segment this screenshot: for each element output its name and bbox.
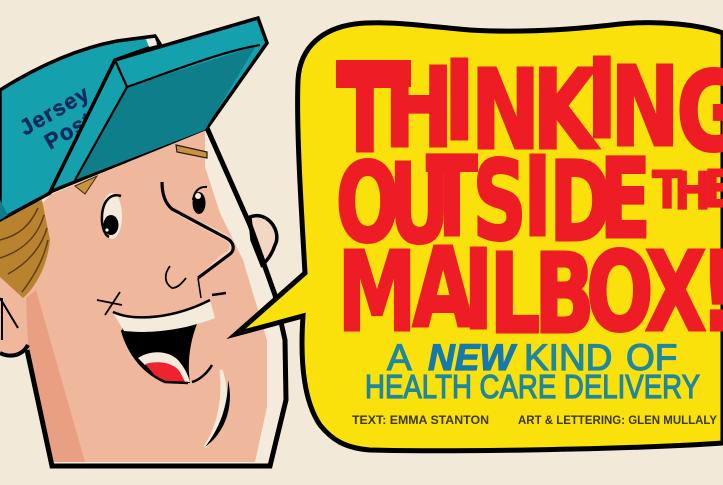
chin dimple xyxy=(205,370,230,447)
title xyxy=(336,35,723,358)
title line: outside: OUTSIDE xyxy=(336,134,651,269)
speech bubble xyxy=(236,23,723,451)
cap lettering: Post xyxy=(40,106,98,154)
subtitle line one: KIND xyxy=(524,337,612,378)
subtitle line one: NEW xyxy=(428,337,517,378)
credits xyxy=(352,413,717,427)
cap lettering: Jersey xyxy=(15,80,94,140)
head outline xyxy=(27,128,286,466)
nose xyxy=(162,182,234,298)
eyebrow left xyxy=(75,176,97,194)
right ear xyxy=(250,216,277,265)
cheek shadow band xyxy=(26,290,85,462)
cap visor xyxy=(50,18,267,192)
left ear lower outline xyxy=(0,345,28,356)
subtitle xyxy=(365,337,700,405)
right eye xyxy=(192,187,207,214)
face skin and left ear xyxy=(0,130,267,462)
subtitle line one: A xyxy=(387,337,412,378)
hair xyxy=(0,200,50,298)
face base with cream rim xyxy=(0,128,286,465)
mail carrier character xyxy=(0,18,286,466)
left eye xyxy=(102,193,122,239)
credit: text author: TEXT: EMMA STANTON xyxy=(352,413,489,427)
cap crown xyxy=(0,36,160,220)
left ear inner mark xyxy=(0,298,18,340)
subtitle line one: OF xyxy=(626,337,677,378)
eyebrow right xyxy=(176,145,207,158)
open smiling mouth xyxy=(97,292,226,383)
credit: art and lettering: ART & LETTERING: GLEN MULLALY xyxy=(518,413,717,427)
